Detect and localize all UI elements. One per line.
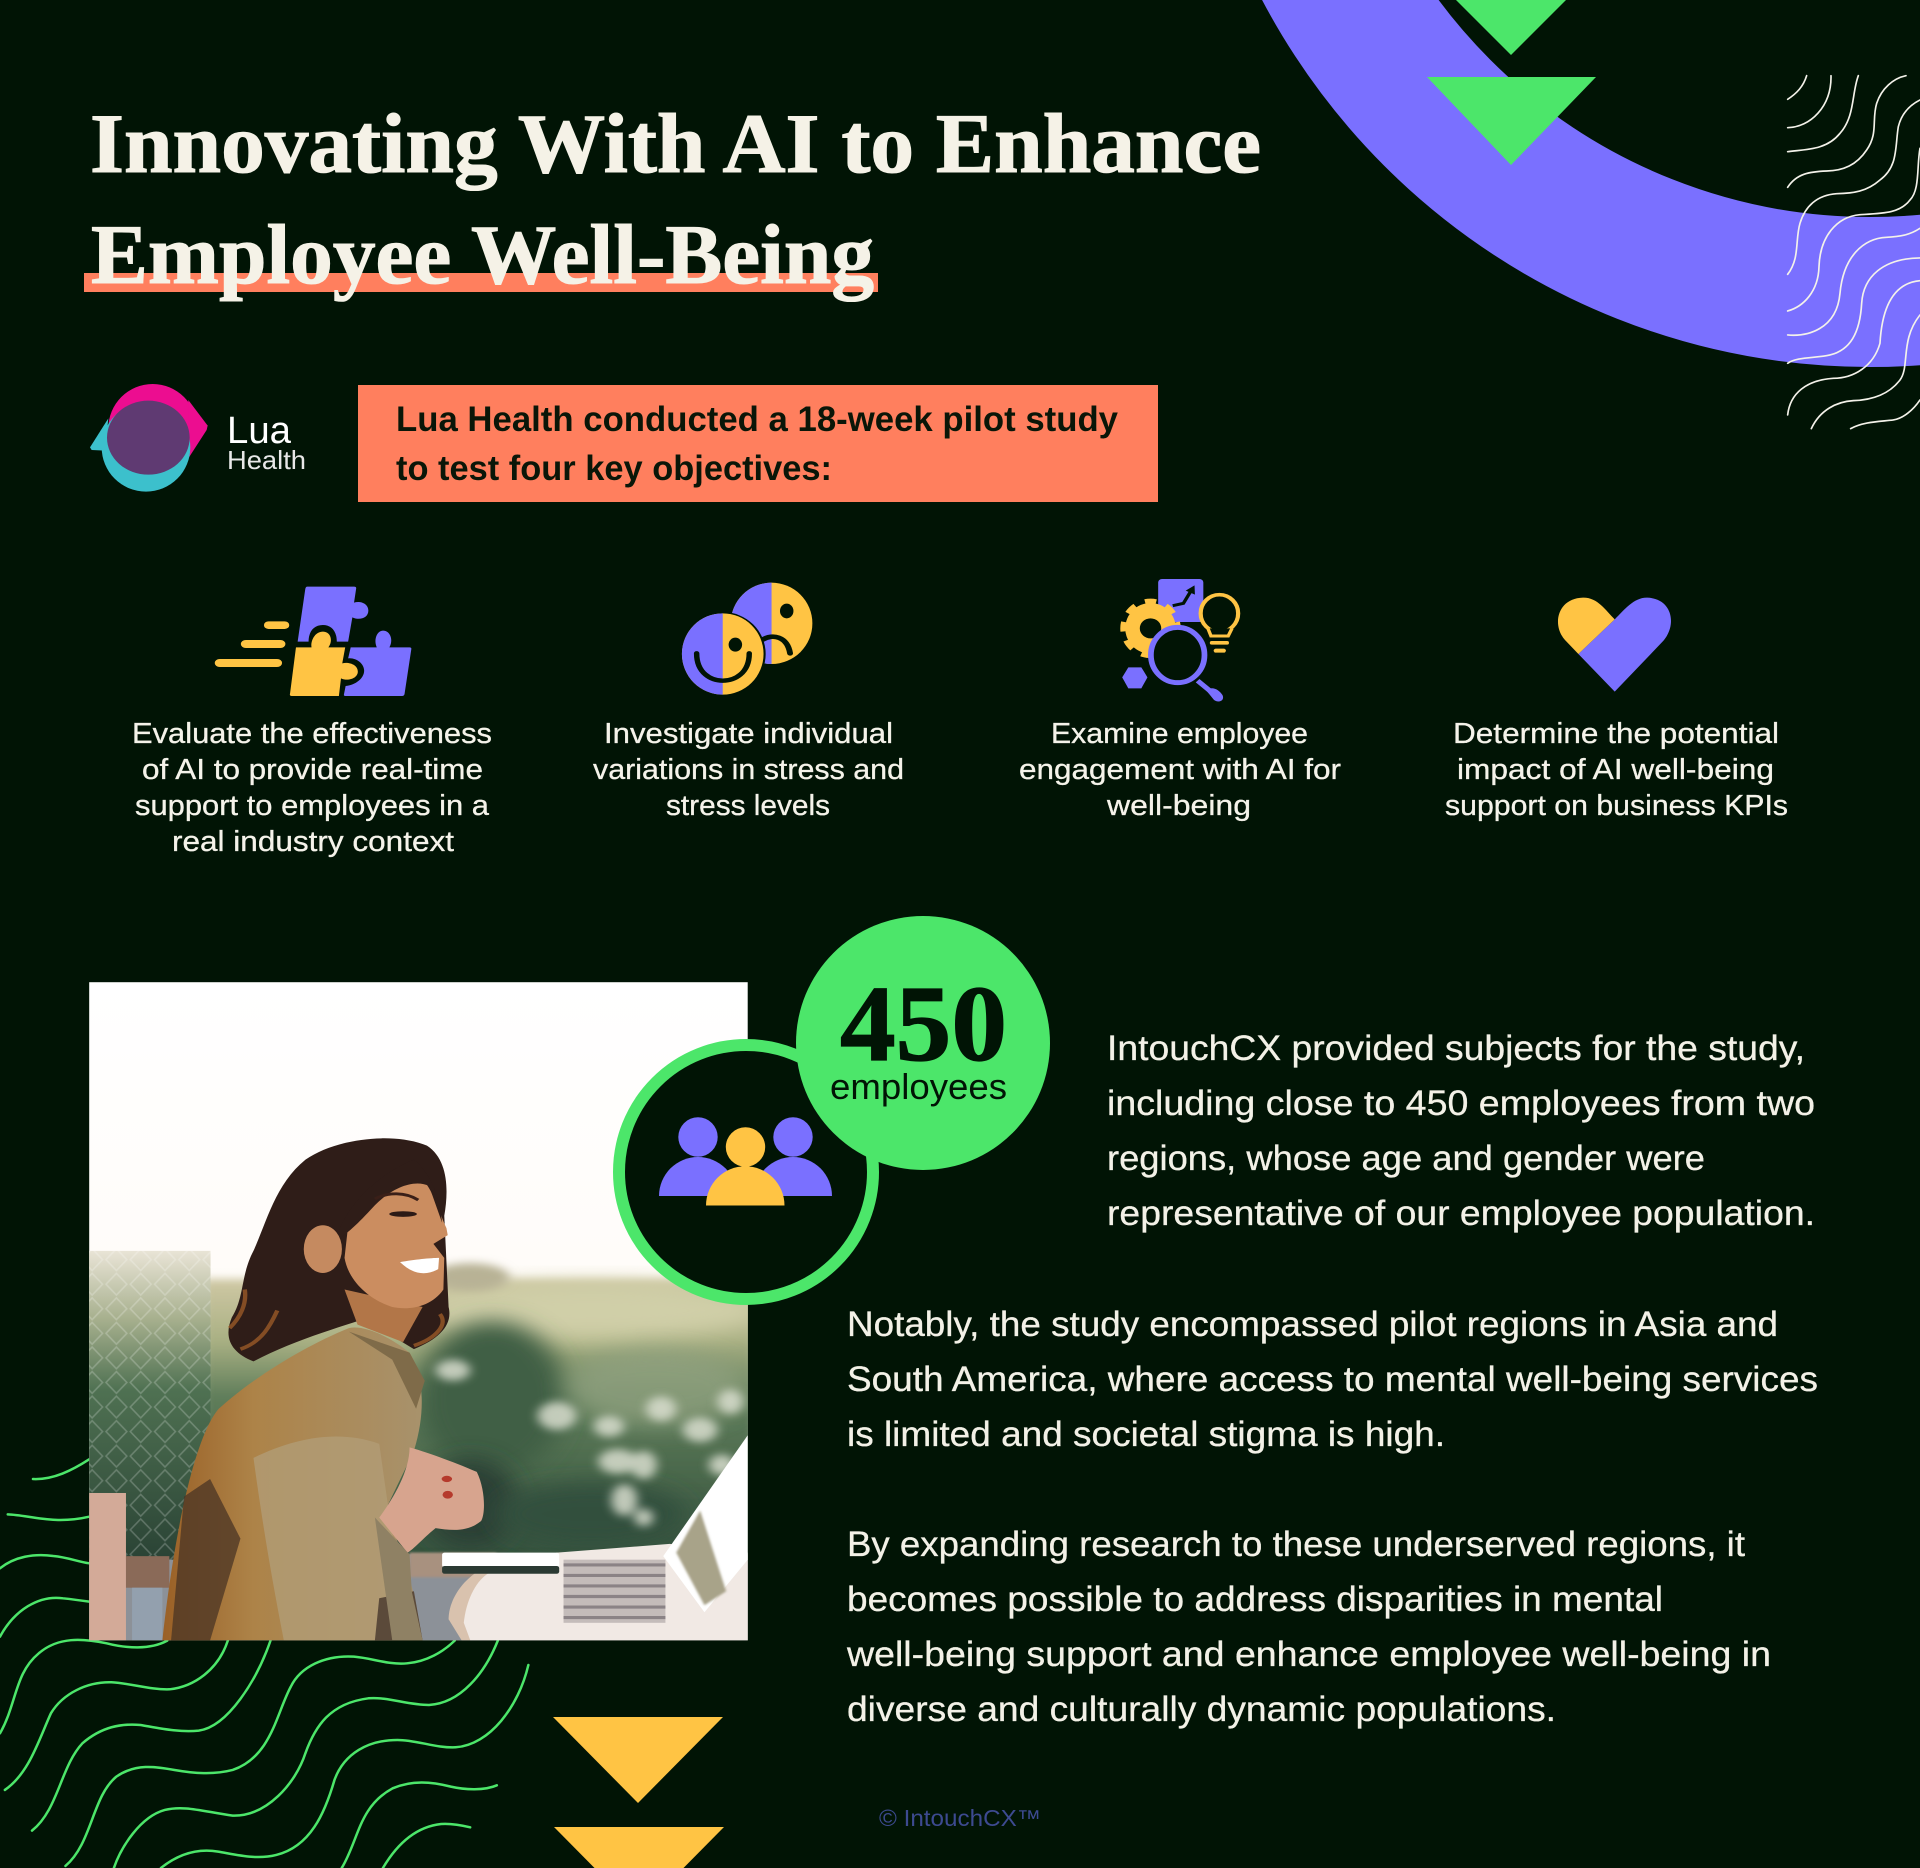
intro callout: Lua Health conducted a 18-week pilot study [396, 400, 1119, 439]
objective 3 text: Examine employee [1051, 718, 1308, 750]
title: Innovating With AI to Enhance [90, 97, 1261, 191]
icon: three people [659, 1117, 832, 1206]
Lua Health logo: Lua [227, 410, 292, 452]
objective 3 text [1019, 718, 1341, 822]
objective 2 text: stress levels [666, 790, 830, 822]
road [89, 1554, 748, 1640]
objective 4 text: impact of AI well-being [1457, 754, 1774, 786]
paragraph: IntouchCX subjects: representative of our employee population. [1107, 1194, 1815, 1233]
objective 4 text: support on business KPIs [1445, 790, 1788, 822]
objective 1 text: of AI to provide real-time [142, 754, 483, 786]
paragraph: pilot regions [847, 1305, 1818, 1454]
paragraph: underserved regions: becomes possible to address disparities in mental [847, 1580, 1663, 1619]
yellow down triangles [553, 1717, 724, 1868]
paragraph: IntouchCX subjects: IntouchCX provided subjects for the study, [1107, 1029, 1805, 1068]
icon: happy and sad faces [680, 583, 812, 696]
paragraph: IntouchCX subjects: regions, whose age and gender were [1107, 1139, 1705, 1178]
objective 1 text: support to employees in a [135, 790, 490, 822]
paragraph: underserved regions: well-being support and enhance employee well-being in [846, 1635, 1771, 1674]
paragraph: underserved regions: diverse and culturally dynamic populations. [847, 1690, 1556, 1729]
objective 2 text [593, 718, 904, 822]
badge: 450 employees: 450 [840, 965, 1007, 1084]
title: Employee Well-Being [91, 208, 874, 302]
background foliage [201, 1263, 765, 1560]
hands [379, 1447, 484, 1553]
paragraph: underserved regions: By expanding research to these underserved regions, it [847, 1525, 1745, 1564]
objective 1 text: Evaluate the effectiveness [132, 718, 492, 750]
title [84, 97, 1261, 302]
copyright: © IntouchCX™ [879, 1805, 1041, 1831]
badge: 450 employees [796, 916, 1050, 1170]
Lua Health logo [90, 384, 306, 492]
paragraph: IntouchCX subjects [1107, 1029, 1815, 1233]
intro callout: to test four key objectives: [396, 449, 832, 488]
laptop [448, 1574, 488, 1640]
hair back [228, 1138, 449, 1361]
jacket [162, 1328, 423, 1640]
neck [345, 1289, 423, 1342]
fringe [347, 1174, 442, 1232]
objective 3 text: well-being [1106, 790, 1251, 822]
decorative purple arc [1258, 0, 1920, 292]
circle: people icon [619, 1045, 873, 1299]
objective 4 text: Determine the potential [1453, 718, 1779, 750]
icon: puzzle pieces [215, 587, 411, 696]
paragraph: IntouchCX subjects: including close to 450 employees from two [1107, 1084, 1815, 1123]
white wavy lines [1788, 76, 1920, 429]
photo: smiling woman with laptop [89, 982, 765, 1640]
green wavy lines [0, 1459, 528, 1868]
objective 1 text: real industry context [172, 826, 454, 858]
intro callout [358, 385, 1158, 502]
objective 3 text: engagement with AI for [1019, 754, 1341, 786]
icon: heart [1558, 598, 1671, 692]
jacket sleeve [375, 1518, 423, 1640]
paragraph: pilot regions: is limited and societal stigma is high. [847, 1415, 1445, 1454]
green down triangles [1427, 0, 1596, 165]
paragraph: underserved regions [846, 1525, 1771, 1729]
icon: gear, chart, bulb and magnifier [1122, 579, 1238, 701]
objective 2 text: Investigate individual [604, 718, 893, 750]
badge: 450 employees: employees [830, 1066, 1007, 1107]
objective 4 text [1445, 718, 1788, 822]
objective 2 text: variations in stress and [593, 754, 904, 786]
mosaic left strip [89, 1251, 211, 1640]
paragraph: pilot regions: Notably, the study encompassed pilot regions in Asia and [847, 1305, 1778, 1344]
face [345, 1175, 448, 1308]
objective 1 text [132, 718, 492, 858]
paragraph: pilot regions: South America, where access to mental well-being services [847, 1360, 1818, 1399]
Lua Health logo: Health [227, 445, 306, 475]
